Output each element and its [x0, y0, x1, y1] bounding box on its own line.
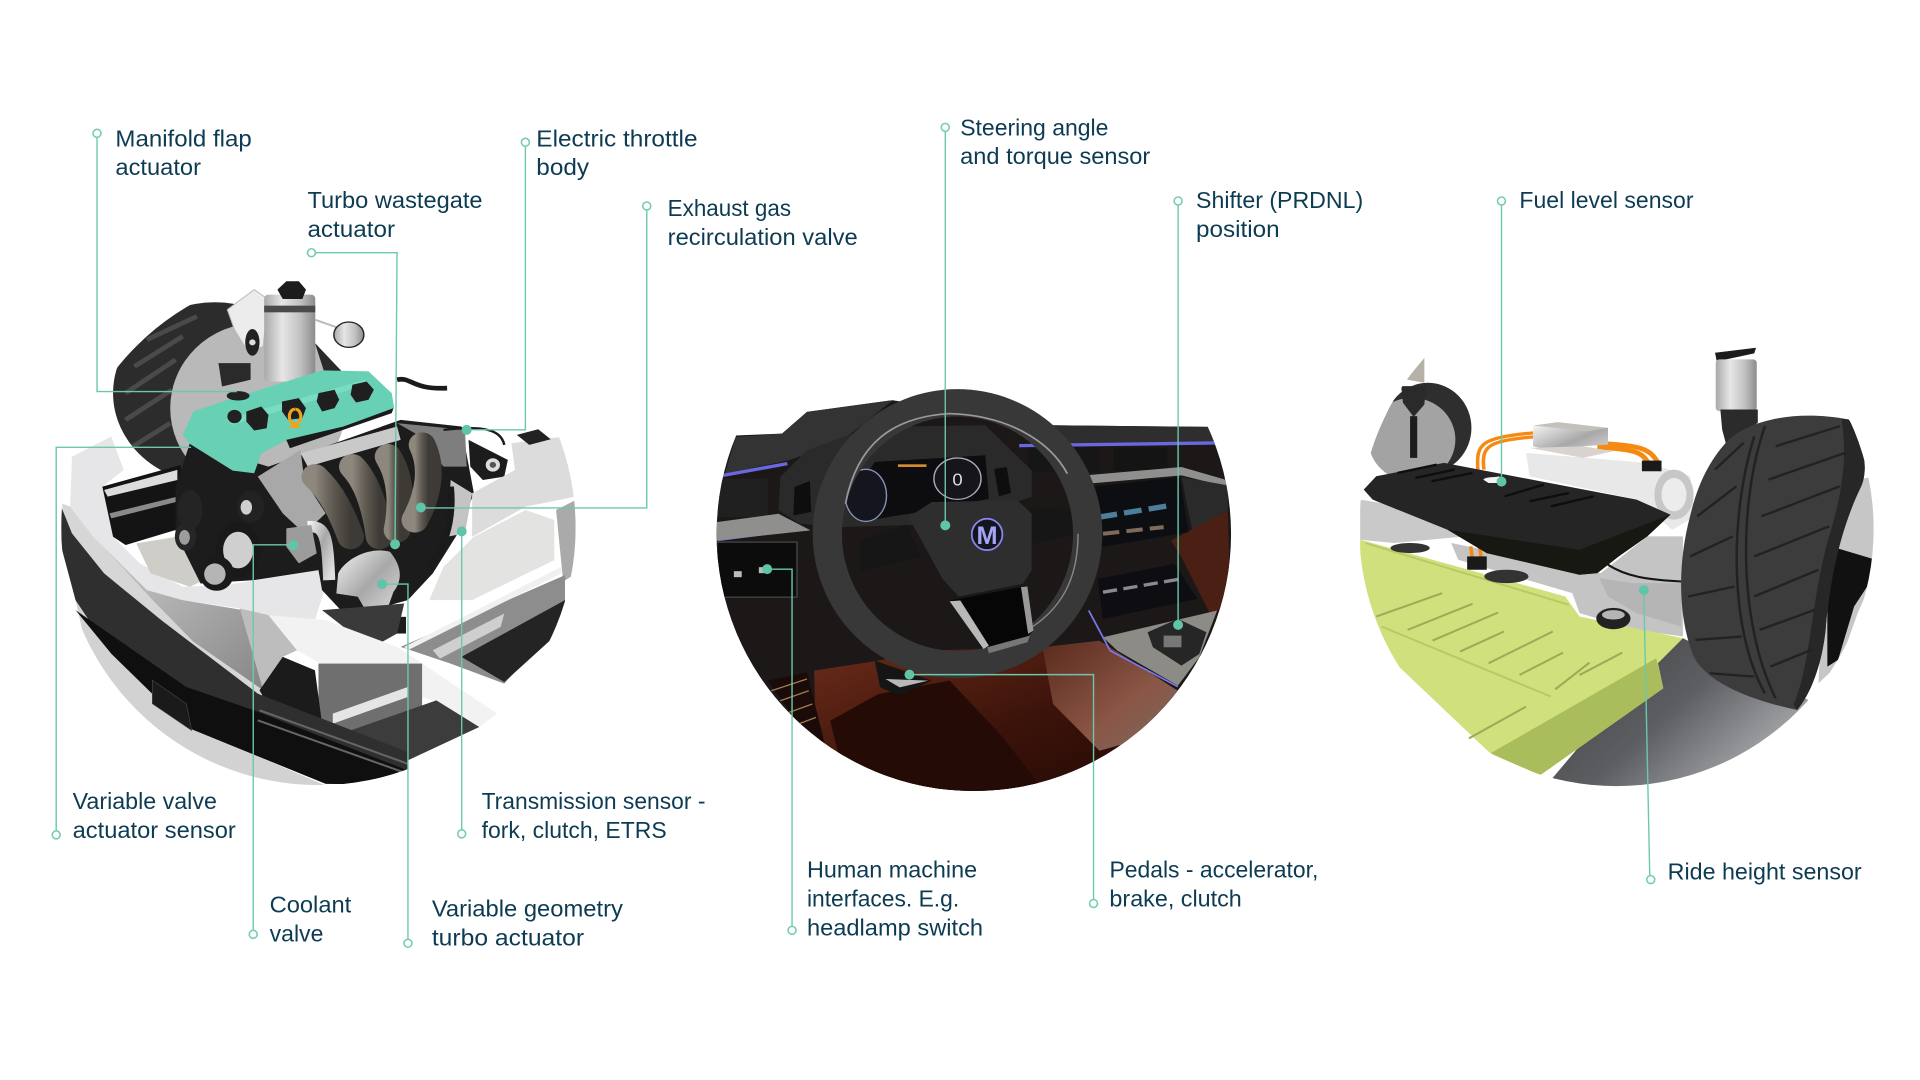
- icon: engine pulleys: [174, 500, 253, 591]
- icon: central crossbeam: [268, 615, 497, 727]
- icon: rear wheel and strut: [1368, 358, 1471, 481]
- label: Human machine interfaces: [807, 857, 983, 940]
- leader: Variable geometry turbo actuator: [377, 579, 412, 947]
- leader: Pedals: [904, 670, 1098, 907]
- frame inner gusset: [240, 608, 297, 690]
- left switch panel: [717, 542, 797, 597]
- console light edge: [1089, 611, 1178, 687]
- leader: Shifter position: [1173, 197, 1183, 630]
- panel: electric chassis illustration: [1360, 348, 1875, 797]
- grey floor area: [136, 537, 200, 587]
- icon: throttle bracket: [517, 429, 551, 445]
- icon: turbocharger: [286, 525, 406, 634]
- right dark console side: [1171, 510, 1230, 614]
- panel: white crash structure: [70, 437, 326, 620]
- right glossy dash: [1181, 477, 1228, 530]
- footwell carpet: [814, 649, 1178, 791]
- leader: Exhaust gas recirculation valve: [416, 202, 651, 512]
- label: Variable valve actuator sensor: actuator sensor: [73, 817, 236, 843]
- leader: Coolant valve: [249, 540, 299, 938]
- panel: cockpit illustration: [700, 400, 1256, 804]
- centre lower touchscreen: [1098, 564, 1198, 619]
- label: Manifold flap actuator: Manifold flap: [115, 125, 252, 151]
- label: Human machine interfaces: headlamp switch: [807, 914, 983, 940]
- icon: gear selector: [1148, 619, 1206, 666]
- label: Coolant valve: Coolant: [270, 891, 352, 917]
- label: Transmission sensor: fork, clutch, ETRS: [482, 817, 667, 843]
- icon: sill vent: [768, 672, 825, 744]
- label: Human machine interfaces: interfaces. E.g.: [807, 885, 959, 911]
- leader: Transmission sensor: [457, 526, 467, 838]
- label: Electric throttle body: Electric throttle: [536, 125, 698, 151]
- icon: radiator: [102, 465, 181, 545]
- dark dashboard base: [716, 400, 1232, 791]
- ambient light strips: [718, 443, 1215, 540]
- label: Turbo wastegate actuator: Turbo wastegate: [307, 187, 483, 213]
- left air vent: [718, 479, 768, 517]
- dash silver trim: [717, 467, 1228, 540]
- label: Exhaust gas recirculation valve: [668, 195, 858, 250]
- icon: bumper: [61, 507, 408, 785]
- label: Transmission sensor: [482, 788, 705, 843]
- label: Variable valve actuator sensor: Variable valve: [73, 788, 217, 814]
- icon: steering wheel lower spoke: [950, 587, 1033, 653]
- leader: Variable valve actuator sensor: [52, 447, 191, 839]
- icon: logo badge: M: [977, 522, 998, 550]
- panel: engine bay illustration: [61, 281, 576, 785]
- right air vents: [1028, 448, 1167, 472]
- shadow below bumper: [76, 600, 326, 785]
- icon: tyre: [1681, 416, 1865, 710]
- footwell side trim: [1042, 641, 1178, 751]
- label: Variable geometry turbo actuator: [432, 895, 623, 950]
- instrument hood: [778, 425, 1032, 527]
- label: Steering angle and torque sensor: Steering angle: [960, 114, 1108, 140]
- label: Pedals: [1109, 857, 1318, 911]
- left dash upper: [725, 400, 893, 474]
- centre upper touchscreen: [1091, 477, 1189, 547]
- label: Variable geometry turbo actuator: turbo actuator: [432, 924, 584, 950]
- cluster screen: 0: [952, 470, 963, 489]
- dark under engine: [322, 603, 404, 644]
- icon: front tyre: [113, 302, 342, 471]
- icon: steering wheel hub: [909, 500, 1032, 597]
- black hoses: [396, 376, 506, 537]
- icon: engine block: [176, 420, 474, 617]
- icon: fuel tank: [1364, 463, 1670, 575]
- label: Turbo wastegate actuator: actuator: [307, 216, 395, 242]
- icon: battery pack: [1360, 540, 1683, 775]
- label: Human machine interfaces: Human machine: [807, 857, 977, 883]
- left subframe: [1360, 500, 1465, 543]
- label: Fuel level sensor: Fuel level sensor: [1519, 187, 1694, 213]
- icon: cable connectors: [1467, 461, 1662, 570]
- lower right chrome: [401, 575, 565, 684]
- icon: logo badge: [972, 519, 1002, 550]
- label: Ride height sensor: Ride height sensor: [1668, 859, 1862, 885]
- dark spokes: [860, 507, 1082, 570]
- label: Shifter position: [1196, 187, 1363, 242]
- icon: steering boot: [556, 500, 576, 582]
- label: Transmission sensor: Transmission sensor -: [482, 788, 705, 814]
- label: Electric throttle body: body: [536, 154, 590, 180]
- grey panel below frame: [93, 537, 263, 690]
- leader: Ride height sensor: [1639, 585, 1655, 884]
- leader: Fuel level sensor: [1497, 197, 1506, 487]
- icon: suspension arm: [1599, 578, 1681, 627]
- console tray: [1103, 611, 1217, 686]
- label: Exhaust gas recirculation valve: Exhaust gas: [668, 195, 791, 221]
- floor panel: [429, 510, 554, 600]
- label: Coolant valve: valve: [270, 920, 323, 946]
- label: Shifter position: position: [1196, 216, 1280, 242]
- leader: Manifold flap actuator: [93, 129, 237, 392]
- label: Pedals: brake, clutch: [1109, 885, 1242, 911]
- label: Coolant valve: [270, 891, 352, 946]
- frame underside wedge: [61, 503, 263, 697]
- icon: valve cover: [183, 370, 394, 473]
- icon: sensor cable: [1608, 565, 1681, 581]
- centre subframe: [1451, 536, 1683, 637]
- leader: Steering angle and torque sensor: [940, 123, 950, 530]
- icon: lower frame: [260, 657, 479, 760]
- icon: intake manifold: [315, 445, 428, 537]
- label: Manifold flap actuator: actuator: [115, 154, 201, 180]
- right subframe: [472, 437, 576, 537]
- dark seat shadow: [830, 680, 1038, 791]
- label: Manifold flap actuator: [115, 125, 252, 180]
- label: Electric throttle body: [536, 125, 698, 180]
- icon: pedals: [875, 661, 932, 696]
- leader: Human machine interfaces: [762, 564, 796, 934]
- icon: alloy wheel: [1818, 476, 1875, 683]
- label: Turbo wastegate actuator: [307, 187, 483, 242]
- icon: steering wheel rim: [827, 403, 1088, 665]
- label: Variable valve actuator sensor: [73, 788, 236, 843]
- cluster screen: [845, 455, 989, 521]
- label: Variable geometry turbo actuator: Variable geometry: [432, 895, 623, 921]
- label: Exhaust gas recirculation valve: recirculation valve: [668, 224, 858, 250]
- icon: orange cables: [1471, 433, 1658, 560]
- right dash upper: [1050, 425, 1215, 445]
- label: Steering angle and torque sensor: [960, 114, 1151, 169]
- side screens: [793, 467, 1011, 515]
- icon: inverter box: [1530, 422, 1613, 458]
- icon: motor unit: [1526, 453, 1695, 530]
- label: Pedals: Pedals - accelerator,: [1109, 857, 1318, 883]
- leader: Electric throttle body: [462, 138, 529, 435]
- icon: under-floor cap: [1596, 608, 1630, 629]
- label: Steering angle and torque sensor: and torque sensor: [960, 143, 1151, 169]
- icon: suspension strut: [227, 281, 364, 381]
- icon: air spring: [1715, 348, 1758, 443]
- label: Shifter position: Shifter (PRDNL): [1196, 187, 1363, 213]
- ground shadow: [1537, 638, 1822, 797]
- leader: Turbo wastegate actuator: [307, 249, 400, 549]
- icon: engine mount: [469, 440, 508, 480]
